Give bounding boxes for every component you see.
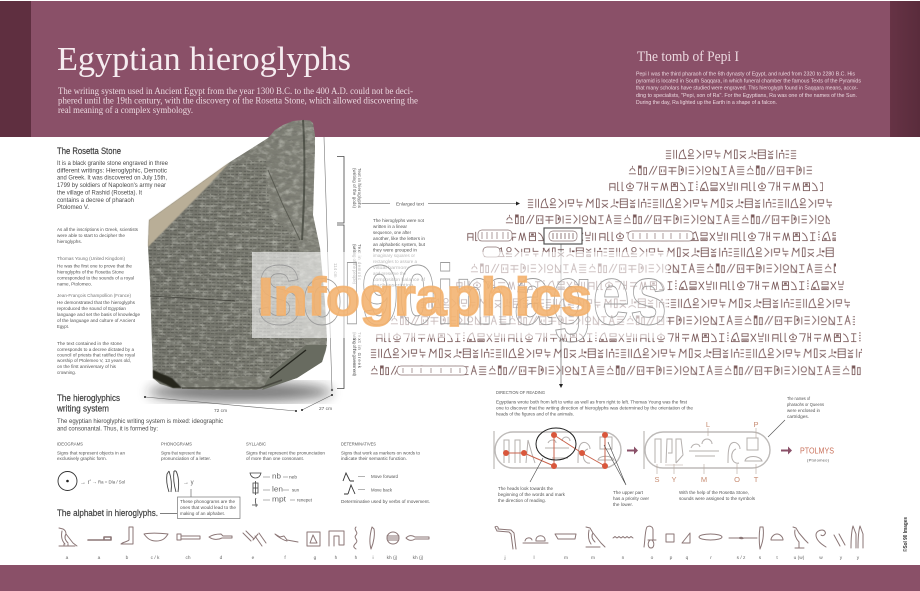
header band <box>0 1 920 137</box>
middle note on sequence: The hieroglyphs were not <box>373 218 425 224</box>
decoded cartouche: Y <box>671 475 677 484</box>
alphabet glyphs, second part <box>495 526 863 549</box>
caption: Rosetta help: With the help of the Rosetta Stone, <box>679 490 749 496</box>
alphabet letter labels: h <box>335 555 338 561</box>
paragraph: decree <box>57 341 135 376</box>
alphabet letter labels: kh (j) <box>413 555 424 561</box>
rotated label: Greek text <box>352 332 362 377</box>
paragraph: Champollion: language and set the basis of knowledge <box>57 312 140 318</box>
writing system intro: and consonantal. Thus, it is formed by: <box>57 426 158 432</box>
decoded cartouche: S <box>654 475 660 484</box>
alphabet letter labels: w <box>819 556 823 561</box>
panel: determinatives: indicate their semantic function. <box>341 456 407 462</box>
paragraph: Champollion: He demonstrated that the hieroglyphs <box>57 300 136 306</box>
callout: phonograms note: ones that would lead to the <box>180 505 236 511</box>
caption: upper part: The upper part <box>613 490 644 496</box>
cartouche with reading order <box>494 428 626 485</box>
panel: determinatives: Signs that work as markers on words to <box>341 450 420 456</box>
result: PTOLMYS: (Ptolomeo) <box>807 458 830 462</box>
caption: head direction <box>498 486 566 504</box>
rotated label: demotic text: (writing of the people) <box>352 244 357 285</box>
panel: determinatives: Move back <box>371 488 393 494</box>
caption: cartridges: pharaohs or Queens <box>787 402 825 408</box>
paragraph: inscriptions in Greek: hieroglyphs. <box>57 239 82 245</box>
panel: ideograms: Signs that represent objects in an <box>57 450 125 456</box>
caption: upper part: the lower. <box>613 502 633 508</box>
alphabet letter labels: j <box>503 555 506 561</box>
heading: the Rosetta Stone: The Rosetta Stone <box>57 146 121 156</box>
Pepi I text: ding to specialists, "Pepi, son of Ra". For the Egyptians, Ra was one of the names of the Sun. <box>636 93 857 99</box>
decoded cartouche <box>644 420 770 484</box>
caption: Rosetta help <box>679 490 756 502</box>
alphabet letter labels: kh (j) <box>387 555 398 561</box>
panel: determinatives <box>341 442 430 505</box>
panel: phonograms: PHONOGRAMS <box>161 442 192 448</box>
panel: ideograms <box>57 442 125 490</box>
highlighted cartouche box <box>544 228 582 244</box>
paragraph: Thomas Young: name, Ptolomeo. <box>57 282 92 288</box>
alphabet letter labels: c / k <box>151 555 160 561</box>
writing system intro <box>57 418 223 432</box>
stone section brackets <box>337 156 344 388</box>
callout: phonograms note <box>178 489 240 518</box>
Rosetta Stone body text: different writings: Hieroglyphic, Demotic <box>57 168 168 174</box>
alphabet letter labels: b <box>126 555 129 561</box>
paragraph: Champollion <box>57 293 140 330</box>
alphabet letter labels: s <box>759 556 762 561</box>
panel: ideograms: Ra = Día / Sol <box>98 480 125 486</box>
callout: phonograms note: These phonograms are the <box>180 499 235 505</box>
callout: phonograms note: making of an alphabet. <box>180 511 225 517</box>
result: PTOLMYS: PTOLMYS <box>800 446 834 456</box>
enlarged text arrow <box>362 202 520 208</box>
Pepi I text: that many scholars have studied were engraved. This hieroglyph found in Saqqara means, accor- <box>636 86 858 92</box>
rotated label: Greek text: Text in Greek <box>357 332 362 369</box>
Rosetta Stone body text: the village of Rashid (Rosetta). It <box>57 190 142 196</box>
arrow to decoded cartouche <box>627 446 638 454</box>
result: PTOLMYS <box>800 446 834 462</box>
decoded cartouche: M <box>701 475 707 484</box>
caption: head direction: beginning of the words and mark <box>498 492 566 498</box>
alphabet letter labels: r <box>710 555 712 561</box>
dimension: width <box>144 396 297 414</box>
panel: syllabic: of more than one consonant. <box>246 456 304 462</box>
dimension: width: 72 cm <box>214 408 227 414</box>
arrow to result <box>781 446 792 454</box>
alphabet letter labels: a <box>66 556 69 561</box>
heading: alphabet in hieroglyphs: The alphabet in hieroglyphs. <box>57 508 158 519</box>
middle note on sequence: and preserve the <box>373 271 406 277</box>
alphabet letter labels: i <box>372 555 374 561</box>
alphabet glyphs, first part <box>59 527 429 549</box>
direction of reading text: DIRECTION OF READING <box>496 390 545 396</box>
middle note on sequence: written in a linear <box>373 224 407 230</box>
caption: upper part <box>613 490 649 508</box>
paragraph: Champollion: Jean-François Champollion (France) <box>57 293 131 299</box>
panel: ideograms: → <box>92 480 97 486</box>
paragraph: decree: worship of Ptolemeo V, 13 years old, <box>57 358 131 364</box>
panel: determinatives: Determinative used by verbs of movement. <box>341 499 430 505</box>
heading: the hieroglyphics writing system <box>56 393 120 414</box>
title: Egyptian hieroglyphs <box>57 41 351 78</box>
middle note on sequence: sequence, one after <box>373 230 411 236</box>
alphabet letter labels: u (w) <box>794 555 805 561</box>
caption: cartridges: The names of <box>787 396 811 402</box>
rotated label: demotic text: Text in demotic <box>357 244 362 281</box>
intro text: phered until the 19th century, with the discovery of the Rosetta Stone, which allowed discovering the <box>58 96 418 106</box>
dimension: height <box>324 137 338 391</box>
decoded cartouche: P <box>753 420 759 429</box>
panel: syllabic: nb <box>272 474 281 480</box>
enlarged text arrow: Enlarged text <box>396 202 425 208</box>
alphabet letter labels: q <box>686 556 689 561</box>
watermark: Infographics <box>258 268 592 327</box>
alphabet letter labels: h <box>355 555 358 561</box>
footer band <box>0 565 920 591</box>
writing system intro: The egyptian hieroglyphic writing system is mixed: ideographic <box>57 418 223 425</box>
middle note on sequence: composition balance of <box>373 277 426 283</box>
direction of reading text: heads of the figures and of the animals. <box>496 412 574 418</box>
alphabet letter labels: d <box>220 555 223 561</box>
panel: ideograms: → r' <box>80 480 91 486</box>
Rosetta Stone body text <box>57 160 168 211</box>
panel: syllabic: mpt <box>272 496 286 504</box>
panel: syllabic: sun <box>292 488 299 494</box>
alphabet letter labels: n <box>622 556 625 561</box>
alphabet letter labels: m <box>591 556 595 561</box>
watermark: Sol90images <box>257 248 667 342</box>
middle note on sequence: another, like the letters in <box>373 236 425 242</box>
paragraph: Champollion: of the language and culture of Ancient <box>57 318 136 324</box>
caption: cartridges <box>768 396 825 437</box>
paragraph: Champollion: Egypt. <box>57 324 69 330</box>
panel: phonograms: Signs that represent the <box>161 450 201 456</box>
caption: head direction: The heads look towards the <box>498 486 553 492</box>
intro text: real meaning of a complex symbology. <box>58 105 193 116</box>
panel: syllabic: neb <box>289 474 297 480</box>
paragraph: inscriptions in Greek: As all the inscriptions in Greek, scientists <box>57 227 139 233</box>
caption: Rosetta help: sounds were assigned to the symbols <box>679 496 756 502</box>
heading: the hieroglyphics writing system: The hieroglyphics <box>57 393 120 404</box>
paragraph: Thomas Young: He was the first one to prove that the <box>57 264 132 270</box>
caption: cartridges: cartridges. <box>787 414 809 420</box>
Rosetta Stone body text: contains a decree of pharaoh <box>57 197 134 204</box>
Rosetta Stone body text: and Greek. It was discovered on July 15th, <box>57 174 167 182</box>
alphabet letter labels: p <box>670 556 673 561</box>
dimension: height: 114 cm <box>333 263 338 278</box>
paragraph: Champollion: reproduced the sound of Egyptian <box>57 306 126 312</box>
middle note on sequence <box>373 218 426 288</box>
alphabet letter labels: f <box>284 555 286 561</box>
panel: syllabic: Signs that represent the pronunciation <box>246 450 325 456</box>
Rosetta Stone body text: Ptolomeo V. <box>57 204 89 211</box>
credit: ©Sol 90 Images <box>902 517 909 552</box>
intro text <box>58 86 418 116</box>
Pepi I text: Pepi I was the third pharaoh of the 6th dynasty of Egypt, and ruled from 2320 to 2280 B.C. His <box>636 72 855 78</box>
Pepi I text: pyramid is located in South Saqqara, in which funeral chamber the famous Texts of the Pyramids <box>636 78 861 84</box>
connector arrow to reading panel <box>559 244 563 388</box>
decoded cartouche: T <box>754 475 759 484</box>
paragraph: decree: The text contained in the stone <box>57 341 122 347</box>
dimension: depth <box>301 394 333 412</box>
Rosetta Stone image <box>148 120 327 390</box>
panel: syllabic <box>246 442 325 507</box>
paragraph: inscriptions in Greek <box>57 227 139 245</box>
heading: the hieroglyphics writing system: writing system <box>56 404 109 414</box>
paragraph: decree: council of priests that ratified the royal <box>57 352 135 358</box>
paragraph: decree: corresponds to a decree dictated by a <box>57 347 134 353</box>
panel: ideograms: IDEOGRAMS <box>57 442 83 448</box>
panel: phonograms: → y <box>183 480 194 486</box>
hieroglyphic inscription <box>370 149 862 376</box>
direction of reading text: one to discover that the writing direction of hieroglyphs was determined by the orientation of the <box>496 406 693 412</box>
caption: head direction: the direction of reading. <box>498 498 546 504</box>
panel: determinatives: DETERMINATIVES <box>341 442 376 448</box>
middle note on sequence: rectangles to assure a <box>373 259 417 265</box>
panel: determinatives: Move forward <box>371 474 398 480</box>
intro text: The writing system used in Ancient Egypt from the year 1300 B.C. to the 400 A.D. could not be deci- <box>58 86 413 97</box>
dimension: depth: 27 cm <box>319 406 332 412</box>
paragraph: inscriptions in Greek: were able to start to decipher the <box>57 233 125 239</box>
rotated label: Greek text: (writing of the government) <box>352 332 357 377</box>
middle note on sequence: imaginary squares or <box>373 253 415 259</box>
alphabet letter labels: s / z <box>737 555 746 561</box>
panel: syllabic: renepet <box>297 498 313 504</box>
decoded cartouche: O <box>734 475 740 484</box>
panel: ideograms: exclusively graphic form. <box>57 456 107 462</box>
caption: upper part: has a priority over <box>613 496 649 502</box>
alphabet letter labels: e <box>252 556 255 561</box>
alphabet letter labels: o <box>651 556 654 561</box>
direction of reading text: Egyptians wrote both from left to write as well as from right to left. Thomas Young was the first <box>496 400 688 406</box>
paragraph: Thomas Young: hieroglyphs of the Rosetta Stone <box>57 270 124 276</box>
alphabet letter labels: m <box>564 556 568 561</box>
Rosetta Stone body text: It is a black granite stone engraved in three <box>57 160 168 167</box>
alphabet letter labels: y <box>840 556 843 561</box>
alphabet letter labels <box>66 555 860 561</box>
rotated label: demotic text <box>352 244 362 285</box>
middle note on sequence: an alphabetic system, but <box>373 242 426 248</box>
cartouches in the inscription <box>397 230 693 375</box>
alphabet letter labels: g <box>314 556 317 561</box>
middle note on sequence: each inscription. <box>373 282 415 288</box>
middle note on sequence: visual harmony <box>373 265 410 271</box>
paragraph: Thomas Young: corresponded to the sounds of a royal <box>57 276 134 282</box>
alphabet letter labels: t <box>776 555 778 561</box>
panel: syllabic: SYLLABIC <box>246 442 266 448</box>
panel: phonograms <box>161 442 211 492</box>
Rosetta Stone body text: 1799 by soldiers of Napoleon's army near <box>57 182 167 189</box>
alphabet letter labels: y <box>857 556 860 561</box>
decoded cartouche: L <box>706 420 710 429</box>
stone shadow <box>148 382 332 402</box>
rotated label: hieroglyphic text <box>352 168 362 209</box>
panel: syllabic: len <box>272 486 283 494</box>
paragraph: Thomas Young: Thomas Young (United Kingdom) <box>57 256 125 262</box>
panel: phonograms: pronunciation of a letter. <box>161 456 211 462</box>
Pepi I text <box>636 72 861 106</box>
alphabet letter labels: ch <box>185 555 191 561</box>
heading: the tomb of Pepi I: The tomb of Pepi I <box>637 49 739 65</box>
paragraph: Thomas Young <box>57 256 134 288</box>
caption: cartridges: were enclosed in <box>787 408 820 414</box>
alphabet letter labels: a <box>98 556 101 561</box>
alphabet letter labels: l <box>533 555 535 561</box>
paragraph: decree: on the first anniversary of his <box>57 364 117 370</box>
Pepi I text: During the day, Ra lighted up the Earth in a shape of a falcon. <box>636 100 777 106</box>
direction of reading text <box>496 390 693 418</box>
middle note on sequence: they were grouped in <box>373 248 417 254</box>
paragraph: decree: crowning. <box>57 370 76 376</box>
rotated label: hieroglyphic text: (writing of the gods) <box>352 168 357 209</box>
rotated label: hieroglyphic text: Text in hieroglyphs <box>357 168 362 209</box>
